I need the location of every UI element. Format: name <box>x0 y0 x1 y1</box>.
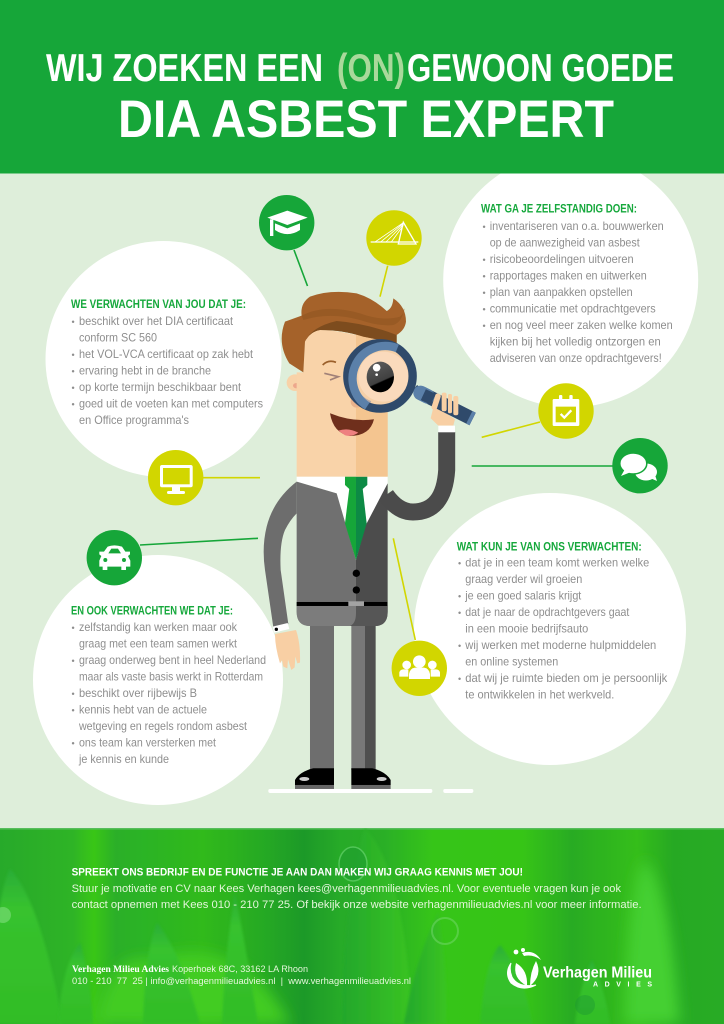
list: what we offer: graag verder wil groeien <box>465 572 582 586</box>
panel: en ook verwachten we <box>33 555 283 805</box>
list: what we offer: dat je naar de opdrachtgevers gaat <box>465 605 630 619</box>
list: requirements: • <box>72 400 75 410</box>
heading: en ook verwachten we: EN OOK VERWACHTEN WE DAT JE: <box>71 603 233 617</box>
title: WIJ ZOEKEN EEN <box>46 47 323 90</box>
list: further expectations <box>72 620 266 766</box>
list: tasks <box>482 219 673 365</box>
list: tasks: • <box>482 304 486 314</box>
list: what we offer: • <box>458 559 461 569</box>
title <box>46 47 674 149</box>
list: what we offer: wij werken met moderne hulpmiddelen <box>464 638 656 652</box>
panel: wat kun je van ons verwachten <box>414 493 686 765</box>
title: (ON) <box>337 47 405 90</box>
list: further expectations: maar als vaste basis werkt in Rotterdam <box>79 670 263 684</box>
list: requirements: en Office programma's <box>79 413 189 427</box>
list: requirements: conform SC 560 <box>79 330 157 344</box>
icon: car <box>87 530 258 585</box>
footer: call to action <box>72 866 642 911</box>
list: what we offer: en online systemen <box>465 654 558 668</box>
list: further expectations: je kennis en kunde <box>78 752 169 766</box>
list: requirements: beschikt over het DIA certificaat <box>79 314 234 328</box>
list: tasks: • <box>482 321 486 331</box>
list: further expectations: graag onderweg bent in heel Nederland <box>79 653 266 667</box>
list: what we offer: dat wij je ruimte bieden om je persoonlijk <box>465 671 667 685</box>
list: requirements: • <box>72 383 75 393</box>
list: further expectations: • <box>72 706 75 716</box>
list: further expectations: • <box>72 689 75 699</box>
footer: contact details: Koperhoek 68C, 33162 LA Rhoon <box>172 964 308 974</box>
icon: chat bubbles <box>472 438 668 493</box>
list: tasks: op de aanwezigheid van asbest <box>490 236 640 250</box>
list: what we offer: dat je in een team komt werken welke <box>465 556 650 570</box>
list: further expectations: • <box>72 623 75 633</box>
footer: contact details: Verhagen Milieu Advies <box>72 964 170 974</box>
list: tasks: • <box>482 272 486 282</box>
heading: wat ga je zelfstandig doen: WAT GA JE ZELFSTANDIG DOEN: <box>481 202 637 216</box>
footer: call to action: SPREEKT ONS BEDRIJF EN DE FUNCTIE JE AAN DAN MAKEN WIJ GRAAG KENNIS MET JOU! <box>72 866 523 878</box>
list: what we offer: in een mooie bedrijfsauto <box>465 622 589 636</box>
footer: grass photo background <box>0 828 724 1024</box>
heading: wat kun je van ons verwachten: WAT KUN JE VAN ONS VERWACHTEN: <box>457 540 642 554</box>
title: DIA ASBEST EXPERT <box>118 90 614 149</box>
list: tasks: plan van aanpakken opstellen <box>490 285 633 299</box>
list: requirements: • <box>72 350 75 360</box>
body and legs <box>264 477 473 793</box>
list: requirements: ervaring hebt in de branche <box>79 364 211 378</box>
list: tasks: • <box>482 222 486 232</box>
list: tasks: communicatie met opdrachtgevers <box>490 302 656 316</box>
list: tasks: inventariseren van o.a. bouwwerken <box>490 219 664 233</box>
list: further expectations: ons team kan versterken met <box>79 736 217 750</box>
list: tasks: adviseren van onze opdrachtgevers! <box>490 351 662 365</box>
list: tasks: risicobeoordelingen uitvoeren <box>490 252 634 266</box>
icon: calendar <box>482 383 594 439</box>
icon: people <box>392 538 447 696</box>
footer: contact details <box>72 964 411 986</box>
icon: monitor <box>148 450 260 505</box>
list: requirements <box>72 314 263 427</box>
panel: wat ga je zelfstandig doen <box>443 152 698 408</box>
head, hair and magnifying glass <box>282 292 473 477</box>
footer: call to action: contact opnemen met Kees 010 - 210 77 25. Of bekijk onze website verhagenmilieuadvies.nl voor meer informatie. <box>72 899 642 911</box>
icon: bridge <box>366 210 422 297</box>
list: tasks: kijken bij het volledig ontzorgen en <box>490 334 661 348</box>
list: requirements: het VOL-VCA certificaat op zak hebt <box>79 347 254 361</box>
list: further expectations: zelfstandig kan werken maar ook <box>79 620 237 634</box>
list: what we offer: te ontwikkelen in het werkveld. <box>465 688 614 702</box>
logo: Verhagen Milieu Advies: Verhagen Milieu <box>543 965 652 982</box>
list: tasks: en nog veel meer zaken welke komen <box>490 318 673 332</box>
list: tasks: • <box>482 288 486 298</box>
footer: contact details: 010 - 210 77 25 | info@verhagenmilieuadvies.nl | www.verhagenmilieuadvies.nl <box>72 976 411 986</box>
list: requirements: op korte termijn beschikbaar bent <box>79 380 242 394</box>
list: what we offer: je een goed salaris krijgt <box>464 588 582 602</box>
logo: Verhagen Milieu Advies <box>508 948 652 989</box>
list: what we offer <box>458 556 667 702</box>
header band <box>0 0 724 174</box>
list: tasks: rapportages maken en uitwerken <box>490 268 647 282</box>
list: requirements: • <box>72 317 75 327</box>
heading: we verwachten van jou: WE VERWACHTEN VAN JOU DAT JE: <box>71 297 246 311</box>
icon: graduation cap <box>259 195 314 286</box>
list: what we offer: • <box>458 608 461 618</box>
list: requirements: goed uit de voeten kan met computers <box>79 396 263 410</box>
list: further expectations: wetgeving en regels rondom asbest <box>78 719 248 733</box>
list: what we offer: • <box>458 592 461 602</box>
list: what we offer: • <box>458 641 461 651</box>
footer: call to action: Stuur je motivatie en CV naar Kees Verhagen kees@verhagenmilieuadvies.nl. Voor eventuele vragen kun je ook <box>72 883 621 895</box>
list: further expectations: kennis hebt van de actuele <box>79 702 207 716</box>
list: further expectations: • <box>72 656 75 666</box>
list: tasks: • <box>482 255 486 265</box>
list: requirements: • <box>72 366 75 376</box>
list: what we offer: • <box>458 674 461 684</box>
raised arm <box>386 432 447 512</box>
list: further expectations: beschikt over rijbewijs B <box>79 686 197 700</box>
illustration: man with magnifying glass <box>264 292 473 793</box>
list: further expectations: graag met een team samen werkt <box>79 636 238 650</box>
panel: we verwachten van jou <box>46 241 282 477</box>
logo: Verhagen Milieu Advies: ADVIES <box>593 982 652 989</box>
list: further expectations: • <box>72 738 75 748</box>
